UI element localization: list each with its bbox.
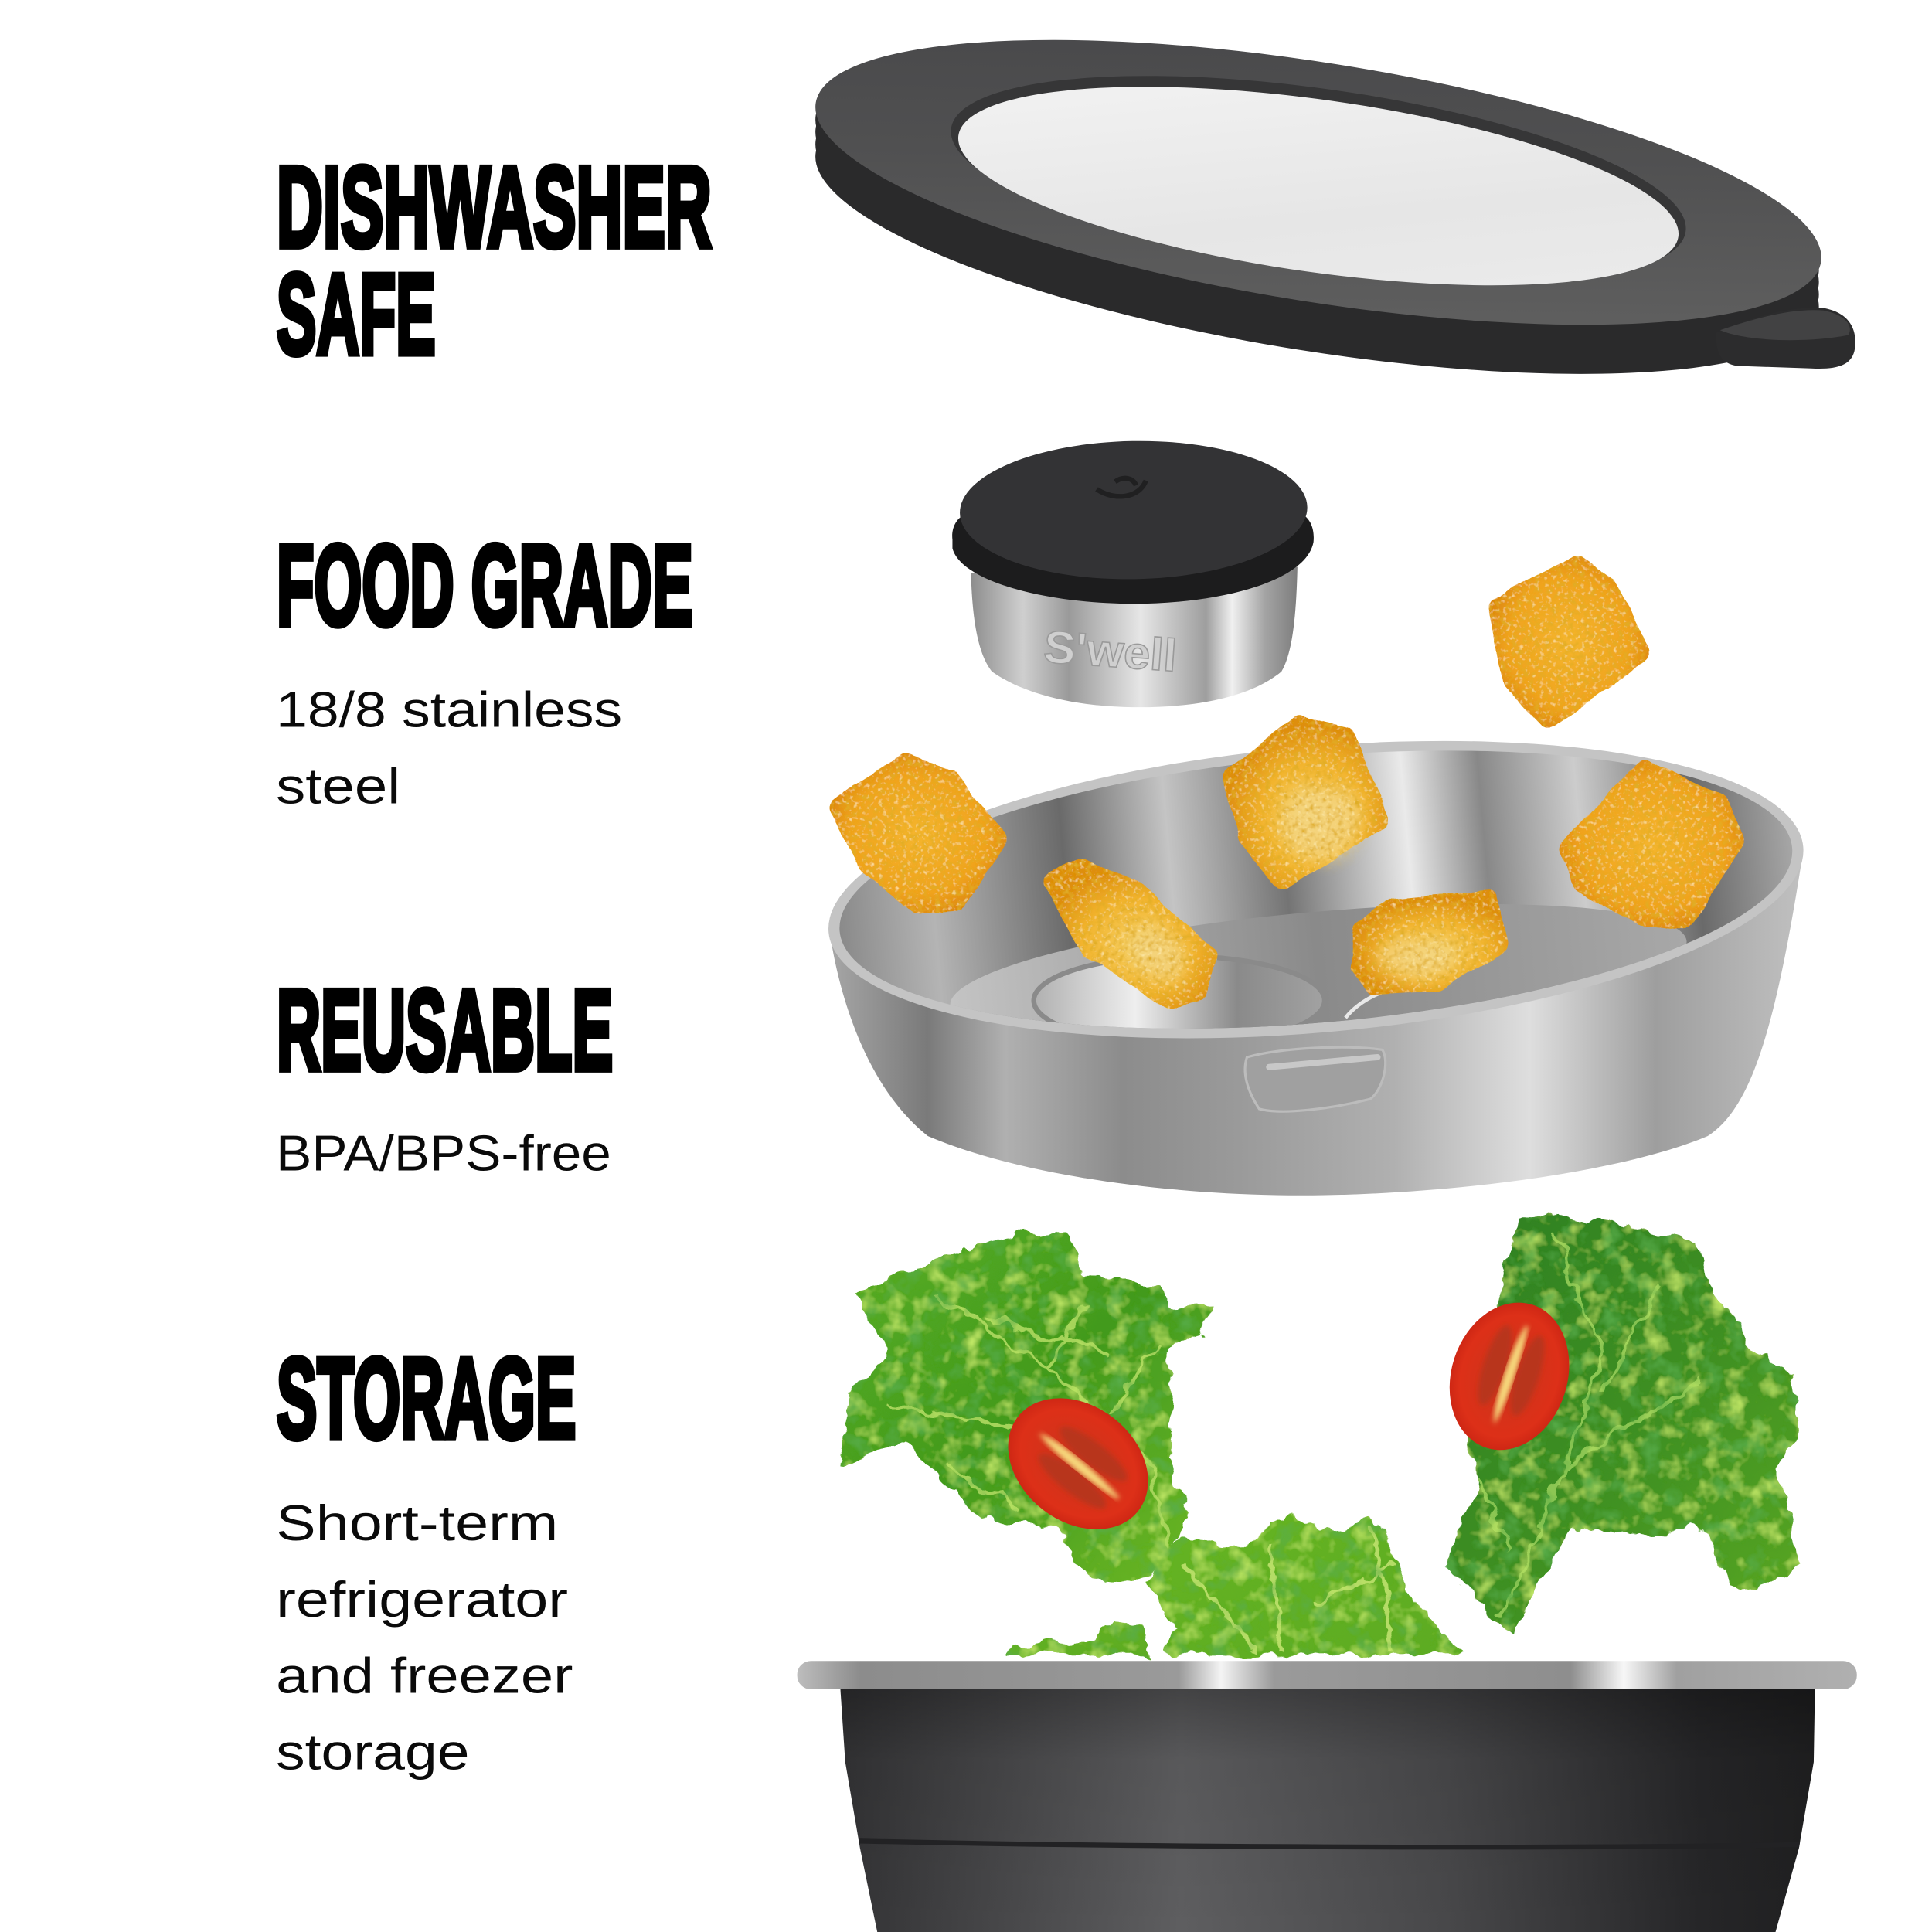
lettuce right leaf	[1444, 1213, 1799, 1636]
crouton left	[840, 767, 995, 902]
lettuce centre leaf	[1004, 1513, 1464, 1655]
tray inner wall	[828, 716, 1804, 1064]
text: storage details	[276, 1495, 573, 1781]
container steel body	[971, 566, 1298, 707]
large bowl lid	[797, 0, 1855, 429]
lid inner recess	[938, 38, 1699, 321]
embossed brand: S'well	[1043, 621, 1179, 682]
heading: dishwasher safe: SAFE	[277, 251, 436, 379]
crouton top right	[1499, 566, 1639, 717]
tray outer wall	[831, 862, 1801, 1196]
tray handle	[1245, 1047, 1386, 1111]
heading: food grade: FOOD GRADE	[277, 522, 693, 649]
heading: storage: STORAGE	[277, 1335, 576, 1463]
container lid skirt	[952, 515, 1314, 604]
text: stainless steel: steel	[276, 758, 400, 815]
tomato slices	[982, 1287, 1587, 1556]
crouton lower left	[1053, 869, 1207, 998]
text: storage details: Short-term	[276, 1495, 558, 1551]
tomato right	[1431, 1287, 1587, 1466]
lettuce left leaf	[838, 1232, 1210, 1583]
heading: dishwasher safe	[277, 144, 712, 379]
small dressing container	[952, 438, 1314, 707]
tomato left	[982, 1371, 1174, 1556]
lid tab	[1716, 308, 1855, 369]
text: BPA free: BPA/BPS-free	[276, 1125, 611, 1182]
bowl body	[838, 1685, 1818, 1932]
text: stainless steel: 18/8 stainless	[276, 682, 622, 738]
tray floor	[951, 904, 1686, 1029]
container lid logo	[1097, 478, 1146, 496]
heading: reusable: REUSABLE	[277, 967, 613, 1094]
text: stainless steel	[276, 682, 622, 815]
lid side wall	[797, 0, 1837, 429]
steel tray	[816, 705, 1815, 1196]
tray rim	[816, 705, 1815, 1075]
text: storage details: refrigerator	[276, 1571, 568, 1628]
crouton lower centre	[1359, 900, 1499, 986]
text: storage details: storage	[276, 1724, 469, 1781]
text: storage details: and freezer	[276, 1648, 573, 1704]
tray floor well	[1031, 955, 1322, 1029]
text column: feature list	[276, 144, 712, 1781]
crouton right	[1571, 771, 1735, 918]
bowl steel rim	[798, 1661, 1857, 1689]
lid window	[947, 50, 1690, 322]
heading: dishwasher safe: DISHWASHER	[277, 144, 712, 271]
container lid top	[959, 438, 1308, 582]
lid top face	[797, 0, 1840, 380]
croutons	[840, 566, 1735, 998]
crouton centre	[1235, 727, 1378, 877]
dark insulated bowl	[798, 1661, 1857, 1932]
lettuce leaves	[838, 1213, 1799, 1655]
